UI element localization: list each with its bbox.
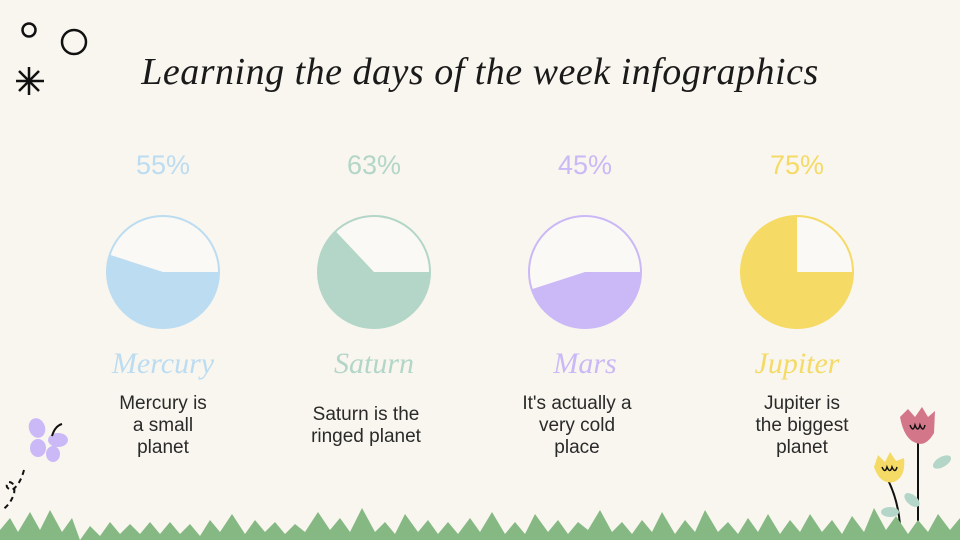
pie: Saturn 63%: [318, 216, 430, 328]
pie charts: [106, 215, 854, 329]
text: Jupiter: [756, 393, 848, 458]
icon: butterfly: [4, 418, 68, 509]
icon: flowers: [874, 407, 951, 524]
text: Jupiter: the biggest: [756, 415, 848, 436]
percent: 75%: 75%: [770, 150, 824, 180]
label: Mars: Mars: [553, 347, 617, 380]
text: Mercury: Mercury is: [119, 393, 207, 414]
text: Jupiter: Jupiter is: [764, 393, 840, 414]
text: Saturn: ringed planet: [311, 426, 421, 447]
pie: Mars 45%: [529, 216, 641, 328]
text: Mars: place: [554, 437, 600, 458]
percent: 63%: 63%: [347, 150, 401, 180]
text: Mercury: [119, 393, 207, 458]
label: Saturn: Saturn: [334, 347, 414, 380]
text: Saturn: Saturn is the: [313, 404, 419, 425]
text: Mars: It's actually a: [522, 393, 632, 414]
grass: [0, 508, 960, 540]
label: Mercury: Mercury: [112, 347, 214, 380]
pie: Mercury 55%: [107, 216, 219, 328]
pie: Jupiter 75%: [741, 216, 853, 328]
text: Mars: [522, 393, 632, 458]
label: Jupiter: Jupiter: [754, 347, 839, 380]
percent: 45%: 45%: [558, 150, 612, 180]
text: Jupiter: planet: [776, 437, 828, 458]
title: Learning the days of the week infographics: [141, 51, 819, 93]
text: Mercury: a small: [133, 415, 193, 436]
percent: 55%: 55%: [136, 150, 190, 180]
text: Mars: very cold: [539, 415, 615, 436]
text: Mercury: planet: [137, 437, 189, 458]
decoration: circles and asterisk: [16, 22, 88, 95]
text: Saturn: [311, 404, 421, 447]
